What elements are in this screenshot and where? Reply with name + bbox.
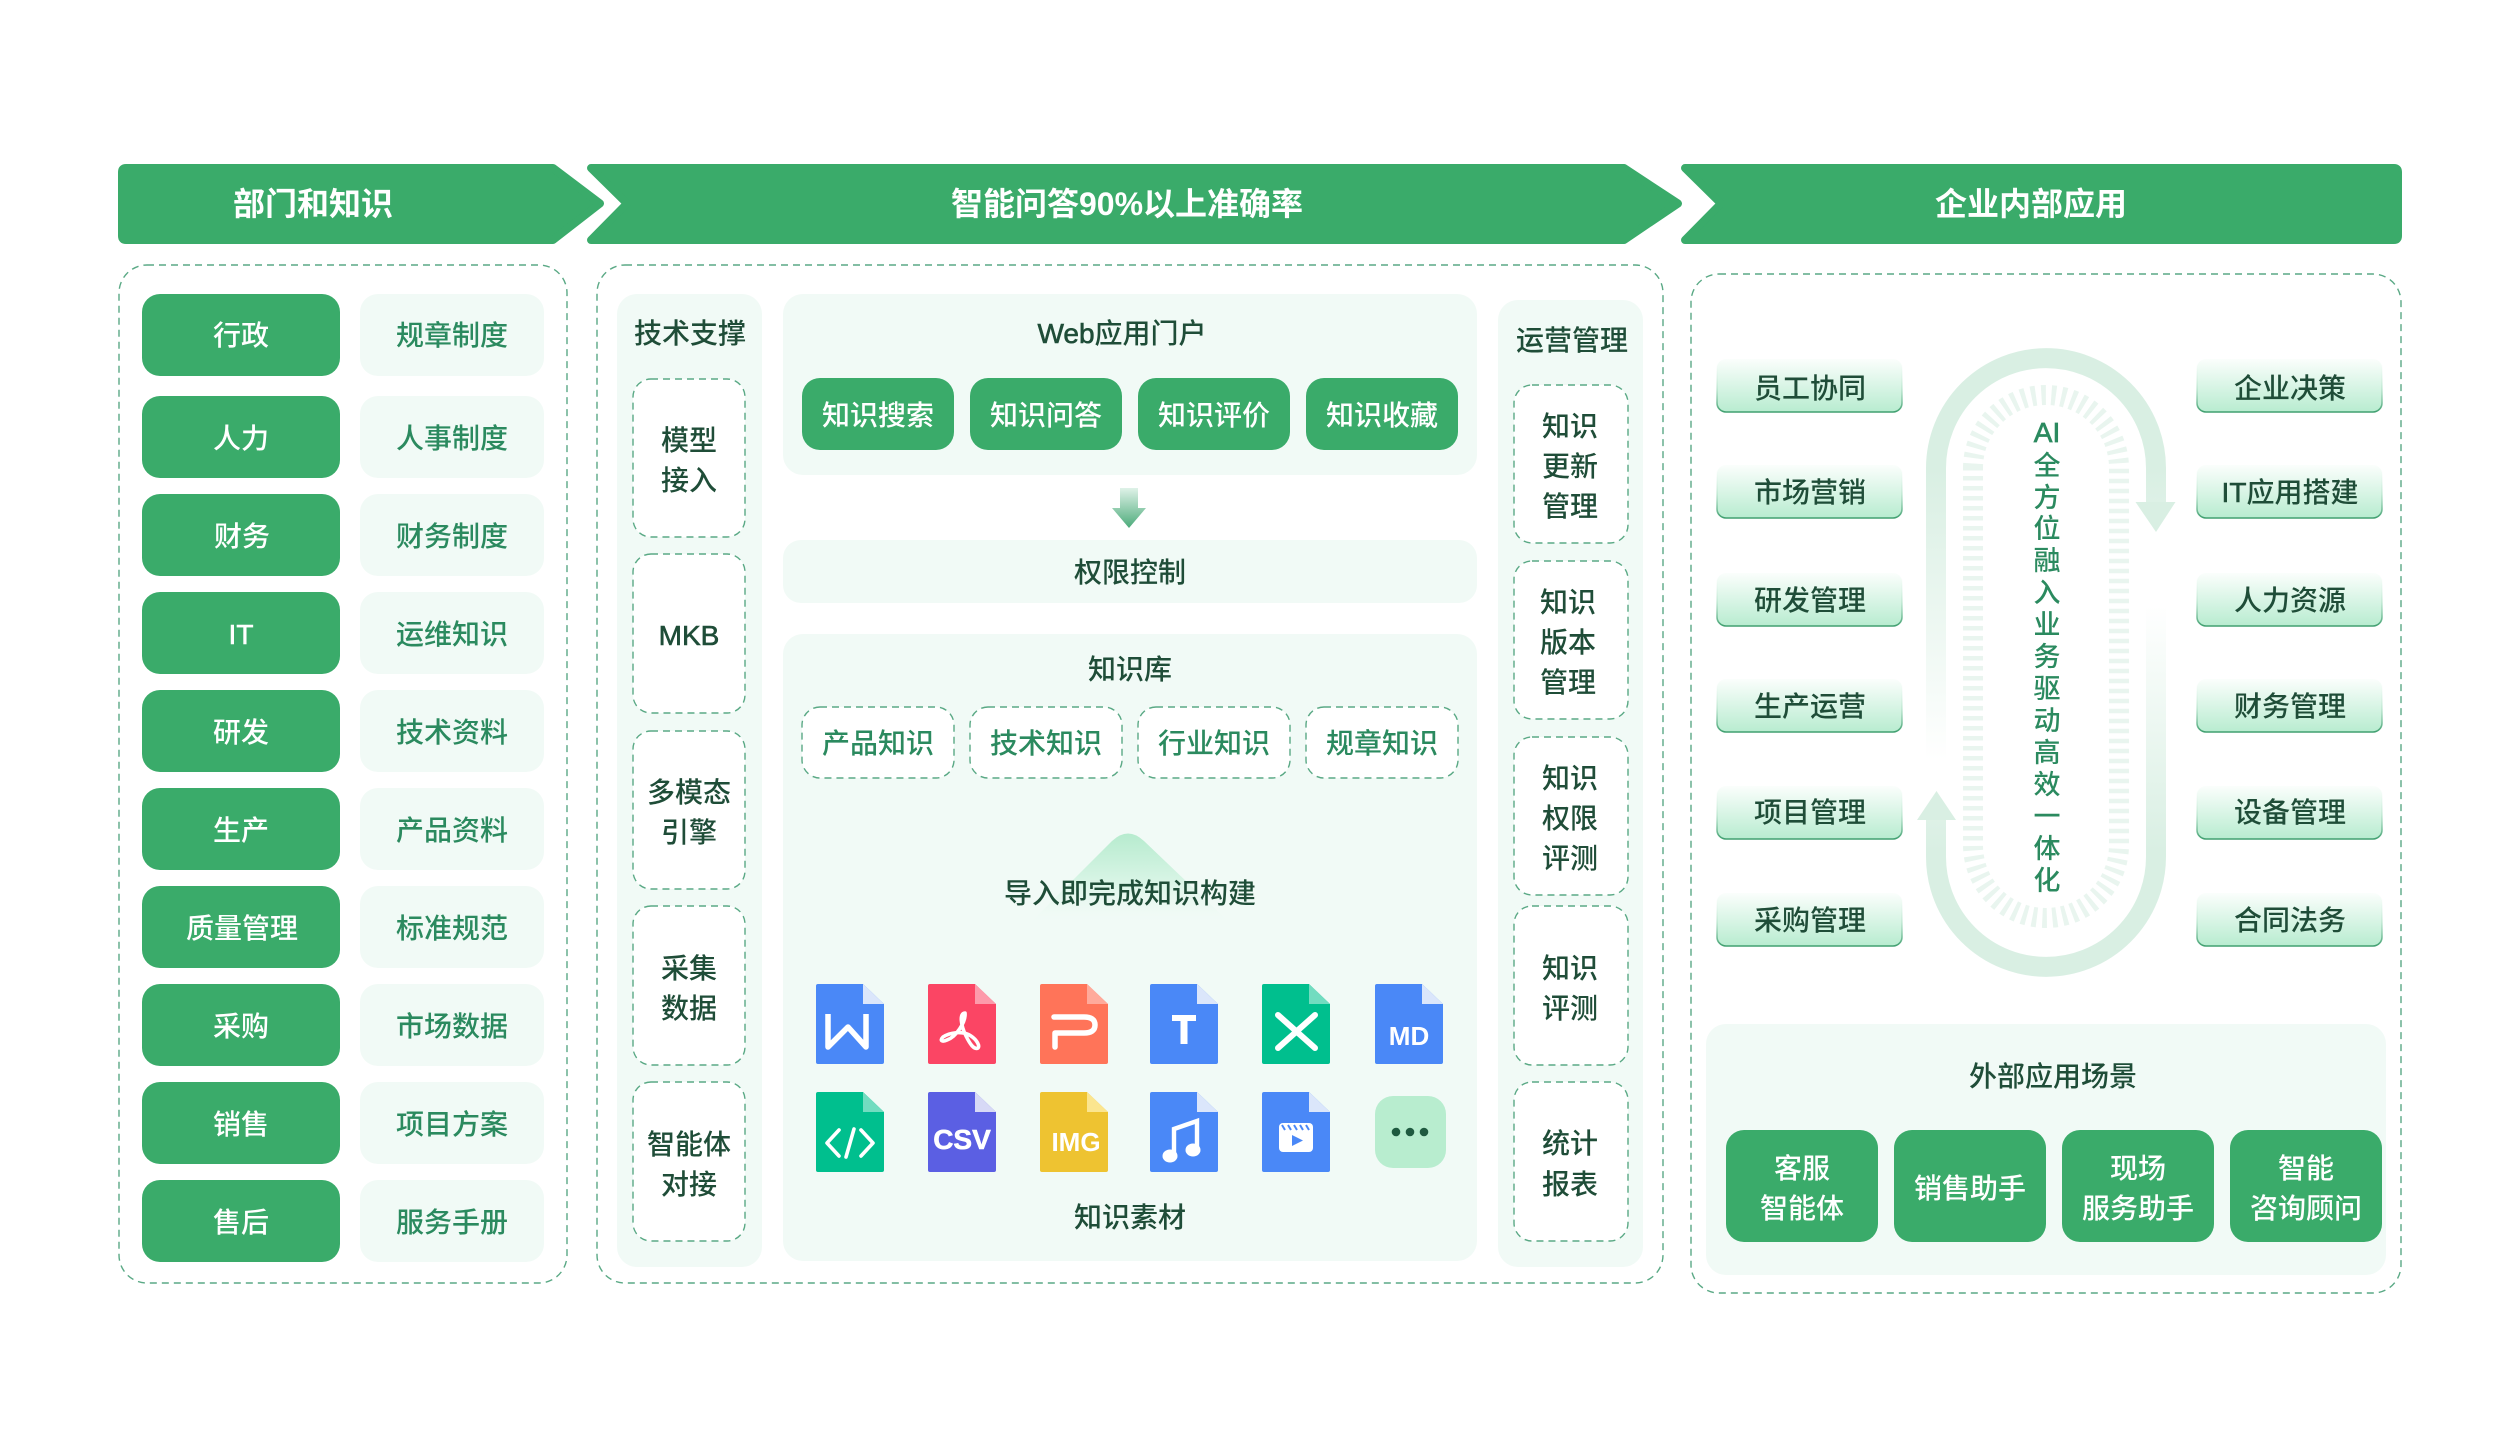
row: finance bbox=[142, 494, 544, 576]
text: AI integration slogan: 效 bbox=[2034, 770, 2060, 800]
banner: internal enterprise applications bbox=[1685, 168, 2398, 240]
row: IT bbox=[142, 592, 544, 674]
diagram: circular arrows bbox=[1917, 358, 2176, 967]
icon: image file: IMG bbox=[1051, 1127, 1101, 1157]
cell: knowledge versions: 管理 bbox=[1540, 667, 1596, 698]
arc: bottom arrow bbox=[1917, 606, 2156, 967]
panel: permission control: 权限控制 bbox=[1074, 557, 1186, 588]
row: sales bbox=[142, 1082, 544, 1164]
row: procurement: 采购 bbox=[213, 1011, 269, 1042]
row: administration: 规章制度 bbox=[396, 320, 508, 351]
chip: technical knowledge bbox=[970, 707, 1122, 778]
row: R&D bbox=[142, 690, 544, 772]
button: smart advisor: 智能 bbox=[2278, 1153, 2334, 1184]
icon: markdown file: MD bbox=[1389, 1021, 1429, 1051]
column: operations management bbox=[1498, 300, 1643, 1267]
row: quality: 质量管理 bbox=[186, 913, 298, 944]
icon: video file bbox=[1262, 1092, 1330, 1172]
pills: left business functions: 采购管理 bbox=[1754, 905, 1866, 936]
shape: build pyramid bbox=[1028, 834, 1232, 925]
banner: smart Q&A accuracy bbox=[591, 168, 1678, 240]
icon: csv file: CSV bbox=[933, 1124, 991, 1155]
text: AI integration slogan: 融 bbox=[2034, 546, 2060, 576]
button: knowledge favourites bbox=[1306, 378, 1458, 450]
arrow: portal to permissions bbox=[1112, 488, 1146, 528]
panel: departments and knowledge bbox=[119, 265, 567, 1283]
row: finance: 财务 bbox=[214, 521, 270, 552]
cell: permission testing: 评测 bbox=[1542, 843, 1598, 874]
cell: knowledge update: 管理 bbox=[1542, 491, 1598, 522]
cell: knowledge evaluation bbox=[1514, 906, 1628, 1065]
icon: csv file bbox=[928, 1092, 996, 1172]
cell: permission testing: 知识 bbox=[1542, 763, 1598, 794]
row: R&D: 研发 bbox=[213, 717, 269, 748]
button: smart advisor bbox=[2230, 1130, 2382, 1242]
panel: knowledge base: 知识库 bbox=[1088, 654, 1172, 685]
row: sales: 项目方案 bbox=[396, 1109, 508, 1140]
icon: word file bbox=[816, 984, 884, 1064]
text: AI integration slogan: 业 bbox=[2034, 610, 2060, 640]
label: import builds knowledge: 导入即完成知识构建 bbox=[1004, 878, 1256, 909]
text: AI integration slogan: AI bbox=[2034, 417, 2060, 448]
arc: top arrow bbox=[1936, 358, 2176, 760]
banner: departments and knowledge bbox=[122, 168, 600, 240]
row: IT: 运维知识 bbox=[396, 619, 508, 650]
row: after-sales: 服务手册 bbox=[396, 1207, 508, 1238]
pills: left business functions: 项目管理 bbox=[1754, 797, 1866, 828]
button: sales assistant: 销售助手 bbox=[1914, 1173, 2026, 1204]
row: quality: 标准规范 bbox=[396, 913, 508, 944]
cell: multimodal engine: 引擎 bbox=[661, 817, 717, 848]
cell: model access: 接入 bbox=[661, 465, 717, 496]
icon: text file bbox=[1150, 984, 1218, 1064]
panel: external application scenarios bbox=[1706, 1024, 2386, 1275]
row: procurement bbox=[142, 984, 544, 1066]
text: AI integration slogan bbox=[2034, 417, 2060, 896]
icon: audio file bbox=[1150, 1092, 1218, 1172]
button: knowledge favourites: 知识收藏 bbox=[1326, 400, 1438, 431]
button: customer service agent bbox=[1726, 1130, 1878, 1242]
label: knowledge materials: 知识素材 bbox=[1074, 1202, 1186, 1233]
button: knowledge review: 知识评价 bbox=[1158, 400, 1270, 431]
pills: left business functions: 市场营销 bbox=[1754, 477, 1866, 508]
cell: knowledge update: 更新 bbox=[1542, 451, 1598, 482]
cell: knowledge evaluation: 评测 bbox=[1542, 993, 1598, 1024]
cell: knowledge update: 知识 bbox=[1542, 411, 1598, 442]
icon: image file bbox=[1040, 1092, 1108, 1172]
row: production: 产品资料 bbox=[396, 815, 508, 846]
pills: right business functions: 企业决策 bbox=[2234, 373, 2346, 404]
cell: knowledge update bbox=[1514, 385, 1628, 543]
button: sales assistant bbox=[1894, 1130, 2046, 1242]
button: field service assistant: 服务助手 bbox=[2082, 1193, 2194, 1224]
row: human resources: 人事制度 bbox=[396, 423, 508, 454]
column: technical support bbox=[617, 294, 762, 1267]
panel: enterprise applications bbox=[1691, 274, 2401, 1293]
text: AI integration slogan: 高 bbox=[2034, 738, 2060, 768]
icon: code file bbox=[816, 1092, 884, 1172]
banner: internal enterprise applications: 企业内部应用 bbox=[1935, 186, 2127, 222]
cell: data collection bbox=[633, 906, 745, 1065]
text: AI integration slogan: 方 bbox=[2034, 483, 2060, 513]
panel: web portal bbox=[783, 294, 1477, 475]
row: sales: 销售 bbox=[213, 1109, 269, 1140]
cell: statistics report: 统计 bbox=[1542, 1128, 1598, 1159]
cell: MKB: MKB bbox=[659, 620, 719, 651]
row: quality bbox=[142, 886, 544, 968]
cell: model access bbox=[633, 379, 745, 537]
panel: smart Q&A platform bbox=[597, 265, 1663, 1283]
button: knowledge Q&A bbox=[970, 378, 1122, 450]
cell: knowledge versions: 版本 bbox=[1540, 627, 1596, 658]
cell: statistics report: 报表 bbox=[1542, 1169, 1598, 1200]
cell: knowledge versions bbox=[1514, 561, 1628, 719]
chip: regulation knowledge: 规章知识 bbox=[1326, 728, 1438, 759]
text: AI integration slogan: 动 bbox=[2034, 706, 2060, 736]
icon: more formats bbox=[1375, 1096, 1446, 1168]
ring: inner tick marks bbox=[1973, 395, 2119, 918]
column: technical support: 技术支撑 bbox=[634, 318, 746, 349]
chip: product knowledge bbox=[802, 707, 954, 778]
cell: statistics report bbox=[1514, 1082, 1628, 1241]
row: production bbox=[142, 788, 544, 870]
pills: left business functions: 研发管理 bbox=[1754, 585, 1866, 616]
row: R&D: 技术资料 bbox=[396, 717, 508, 748]
pills: left business functions: 员工协同 bbox=[1754, 373, 1866, 404]
cell: agent integration: 智能体 bbox=[647, 1129, 731, 1160]
chip: industry knowledge bbox=[1138, 707, 1290, 778]
pills: right business functions: 设备管理 bbox=[2234, 797, 2346, 828]
button: smart advisor: 咨询顾问 bbox=[2250, 1193, 2362, 1224]
row: administration: 行政 bbox=[213, 320, 269, 351]
cell: data collection: 采集 bbox=[661, 953, 717, 984]
pills: right business functions: 财务管理 bbox=[2234, 691, 2346, 722]
icon: markdown file bbox=[1375, 984, 1443, 1064]
button: knowledge search bbox=[802, 378, 954, 450]
chip: product knowledge: 产品知识 bbox=[822, 728, 934, 759]
row: human resources bbox=[142, 396, 544, 478]
row: after-sales: 售后 bbox=[213, 1207, 269, 1238]
cell: data collection: 数据 bbox=[661, 993, 717, 1024]
text: AI integration slogan: 体 bbox=[2034, 834, 2060, 864]
panel: web portal: Web应用门户 bbox=[1037, 318, 1207, 349]
button: field service assistant: 现场 bbox=[2110, 1153, 2166, 1184]
text: AI integration slogan: 全 bbox=[2034, 451, 2060, 481]
text: AI integration slogan: 化 bbox=[2034, 866, 2060, 896]
button: knowledge Q&A: 知识问答 bbox=[990, 400, 1102, 431]
cell: knowledge versions: 知识 bbox=[1540, 587, 1596, 618]
row: human resources: 人力 bbox=[213, 423, 269, 454]
cell: agent integration bbox=[633, 1082, 745, 1241]
row: administration bbox=[142, 294, 544, 376]
button: customer service agent: 客服 bbox=[1774, 1153, 1830, 1184]
icon: excel file bbox=[1262, 984, 1330, 1064]
column: operations management: 运营管理 bbox=[1516, 325, 1628, 356]
pills: left business functions bbox=[1717, 359, 1902, 946]
row: procurement: 市场数据 bbox=[396, 1011, 508, 1042]
cell: model access: 模型 bbox=[661, 425, 717, 456]
row: after-sales bbox=[142, 1180, 544, 1262]
pills: right business functions: 人力资源 bbox=[2234, 585, 2346, 616]
chip: technical knowledge: 技术知识 bbox=[990, 728, 1102, 759]
cell: MKB bbox=[633, 554, 745, 713]
text: AI integration slogan: 一 bbox=[2034, 802, 2060, 832]
pills: left business functions: 生产运营 bbox=[1754, 691, 1866, 722]
row: production: 生产 bbox=[213, 815, 269, 846]
row: IT: IT bbox=[229, 619, 253, 650]
banner: smart Q&A accuracy: 智能问答90%以上准确率 bbox=[951, 186, 1303, 222]
button: customer service agent: 智能体 bbox=[1760, 1193, 1844, 1224]
cell: multimodal engine bbox=[633, 731, 745, 889]
pills: right business functions: 合同法务 bbox=[2234, 905, 2346, 936]
banner: departments and knowledge: 部门和知识 bbox=[233, 186, 393, 222]
cell: permission testing: 权限 bbox=[1542, 803, 1598, 834]
panel: permission control bbox=[783, 540, 1477, 603]
button: knowledge search: 知识搜索 bbox=[822, 400, 934, 431]
pills: right business functions bbox=[2197, 359, 2382, 946]
pills: right business functions: IT应用搭建 bbox=[2222, 477, 2358, 508]
button: field service assistant bbox=[2062, 1130, 2214, 1242]
text: AI integration slogan: 驱 bbox=[2034, 674, 2060, 704]
row: finance: 财务制度 bbox=[396, 521, 508, 552]
text: AI integration slogan: 务 bbox=[2034, 642, 2060, 672]
cell: permission testing bbox=[1514, 737, 1628, 895]
icon: pdf file bbox=[928, 984, 996, 1064]
cell: knowledge evaluation: 知识 bbox=[1542, 953, 1598, 984]
panel: knowledge base bbox=[783, 634, 1477, 1261]
chip: industry knowledge: 行业知识 bbox=[1158, 728, 1270, 759]
text: AI integration slogan: 入 bbox=[2034, 578, 2060, 608]
icon: ppt file bbox=[1040, 984, 1108, 1064]
panel: external application scenarios: 外部应用场景 bbox=[1969, 1061, 2137, 1092]
chip: regulation knowledge bbox=[1306, 707, 1458, 778]
cell: multimodal engine: 多模态 bbox=[647, 777, 731, 808]
cell: agent integration: 对接 bbox=[661, 1169, 717, 1200]
button: knowledge review bbox=[1138, 378, 1290, 450]
text: AI integration slogan: 位 bbox=[2034, 514, 2060, 544]
